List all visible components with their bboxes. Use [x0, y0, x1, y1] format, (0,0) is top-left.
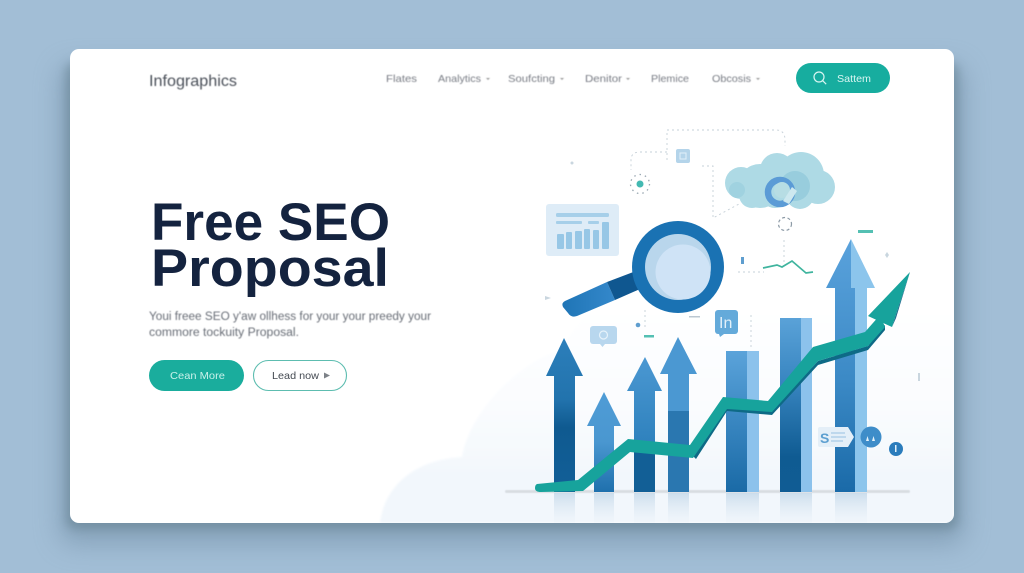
heading: Proposal — [151, 239, 389, 298]
button: Lead now — [254, 360, 346, 390]
small chart card — [546, 204, 619, 256]
button: Lead now: Lead now — [272, 370, 319, 382]
speech tag with S — [818, 427, 854, 447]
description text: Youi freee SEO y'aw ollhess for your your preedy your — [149, 311, 431, 323]
icon: LinkedIn badge — [715, 310, 738, 337]
navigation menu: Plemice — [651, 73, 689, 85]
button: Cean More — [149, 360, 244, 391]
navigation menu: Flates — [386, 73, 417, 85]
logo: Infographics: Infographics — [149, 73, 237, 90]
magnifying glass — [562, 221, 724, 317]
speech tag with S: S — [820, 430, 829, 446]
teal dashes — [644, 230, 873, 338]
icon: teal target dot — [630, 174, 650, 194]
small line chart — [763, 261, 813, 273]
mini bars — [557, 222, 609, 249]
arrow 3 — [627, 357, 662, 492]
navigation menu: Analytics — [438, 73, 481, 85]
description text: commore tockuity Proposal. — [149, 327, 299, 339]
bar reflections — [554, 493, 867, 523]
heading — [151, 193, 390, 298]
icon: blue circle badge — [860, 426, 882, 448]
dashed connector lines — [631, 130, 785, 348]
search button: Sattem — [837, 73, 871, 85]
icon: search — [814, 72, 826, 84]
navigation menu: Denitor — [585, 73, 623, 85]
arrow 1 — [546, 338, 583, 492]
arrow 2 — [587, 392, 621, 492]
icon: LinkedIn badge: In — [719, 315, 732, 332]
icon: small square badge — [676, 149, 690, 163]
navigation menu: Obcosis — [712, 73, 751, 85]
bar chart with arrows — [546, 239, 875, 492]
cloud — [725, 152, 835, 209]
bar 5 — [726, 351, 759, 492]
bar 7: tall arrow — [826, 239, 875, 492]
search button — [796, 63, 890, 93]
decorative specks — [545, 162, 920, 381]
trend arrow — [535, 272, 910, 492]
card — [60, 49, 964, 544]
heading: Free SEO — [151, 193, 390, 252]
icon: speech badge — [590, 326, 617, 347]
icon: loading ring — [778, 218, 792, 230]
navigation menu: Soufcting — [508, 73, 555, 85]
description text — [149, 311, 431, 339]
donut chart — [768, 180, 797, 204]
navigation menu — [386, 73, 760, 85]
arrow 4 — [660, 337, 697, 492]
bar 6 — [780, 318, 812, 492]
icon: small circle badge — [889, 442, 903, 456]
floor shadow — [505, 490, 910, 493]
button: Cean More: Cean More — [170, 370, 225, 382]
